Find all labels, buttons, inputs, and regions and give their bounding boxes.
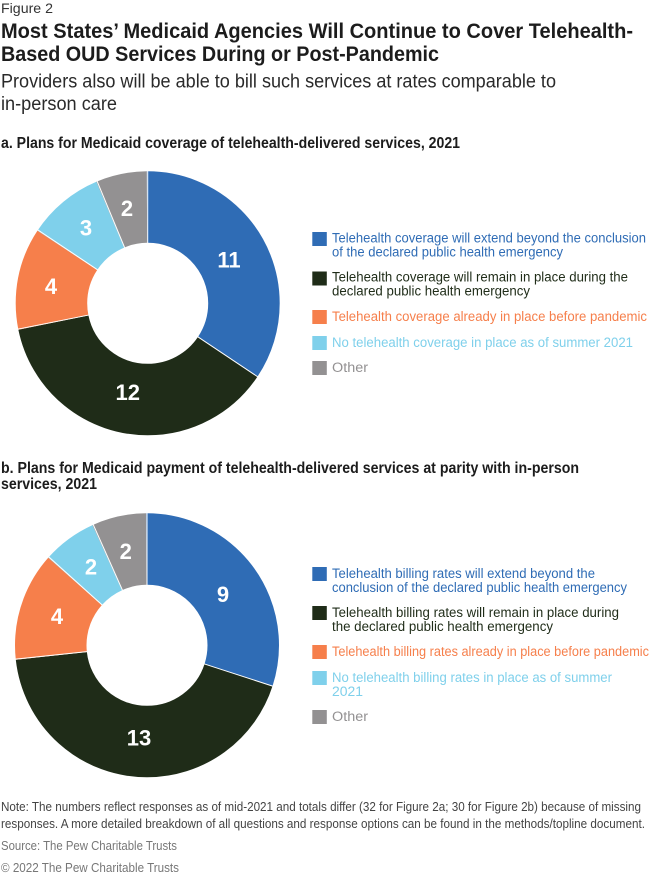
donut chart a xyxy=(17,170,259,405)
figure label: Figure 2 xyxy=(1,0,53,16)
donut chart b: 13 xyxy=(127,726,151,750)
donut chart b: 4 xyxy=(51,604,64,629)
donut chart a: 2 xyxy=(121,196,133,221)
legend b: Other xyxy=(332,709,369,724)
heading b: b. Plans for Medicaid payment of telehealth-delivered services at parity with in-person xyxy=(1,460,579,477)
heading b xyxy=(1,460,579,493)
heading a: a. Plans for Medicaid coverage of telehealth-delivered services, 2021 xyxy=(1,135,460,152)
legend a: of the declared public health emergency xyxy=(332,244,563,260)
subtitle xyxy=(1,72,556,115)
legend a: declared public health emergency xyxy=(332,284,530,298)
legend b: the declared public health emergency xyxy=(332,619,553,634)
donut chart b: 9 xyxy=(217,582,229,607)
legend b: No telehealth billing rates in place as of summer xyxy=(332,670,612,685)
legend b: conclusion of the declared public health emergency xyxy=(332,580,627,595)
legend b xyxy=(312,566,649,724)
legend b: Telehealth billing rates will remain in place during xyxy=(332,605,619,620)
copyright: © 2022 The Pew Charitable Trusts xyxy=(1,861,179,875)
donut chart b: 2 xyxy=(85,554,97,580)
legend a: Other xyxy=(332,360,369,375)
note xyxy=(1,800,645,831)
legend a: No telehealth coverage in place as of summer 2021 xyxy=(332,335,633,350)
legend a: Telehealth coverage will extend beyond the conclusion xyxy=(332,230,646,246)
donut chart a: 3 xyxy=(80,216,92,240)
donut chart a: 11 xyxy=(217,248,241,272)
legend b: 2021 xyxy=(332,684,363,699)
donut chart a: 4 xyxy=(45,274,58,299)
donut chart a: 12 xyxy=(115,380,140,405)
panel: coverage xyxy=(1,135,647,405)
panel: payment xyxy=(1,460,649,750)
donut chart b xyxy=(14,512,274,750)
subtitle: Providers also will be able to bill such services at rates comparable to xyxy=(1,72,556,92)
title: Based OUD Services During or Post-Pandemic xyxy=(1,42,439,66)
legend a: Telehealth coverage already in place before pandemic xyxy=(332,309,647,324)
subtitle: in-person care xyxy=(1,94,117,115)
donut chart b: 2 xyxy=(120,539,132,564)
title xyxy=(1,19,633,66)
legend a xyxy=(312,230,647,375)
heading b: services, 2021 xyxy=(1,476,97,493)
legend b: Telehealth billing rates will extend beyond the xyxy=(332,566,595,581)
legend a: Telehealth coverage will remain in place during the xyxy=(332,270,628,284)
source: Source: The Pew Charitable Trusts xyxy=(1,839,177,853)
